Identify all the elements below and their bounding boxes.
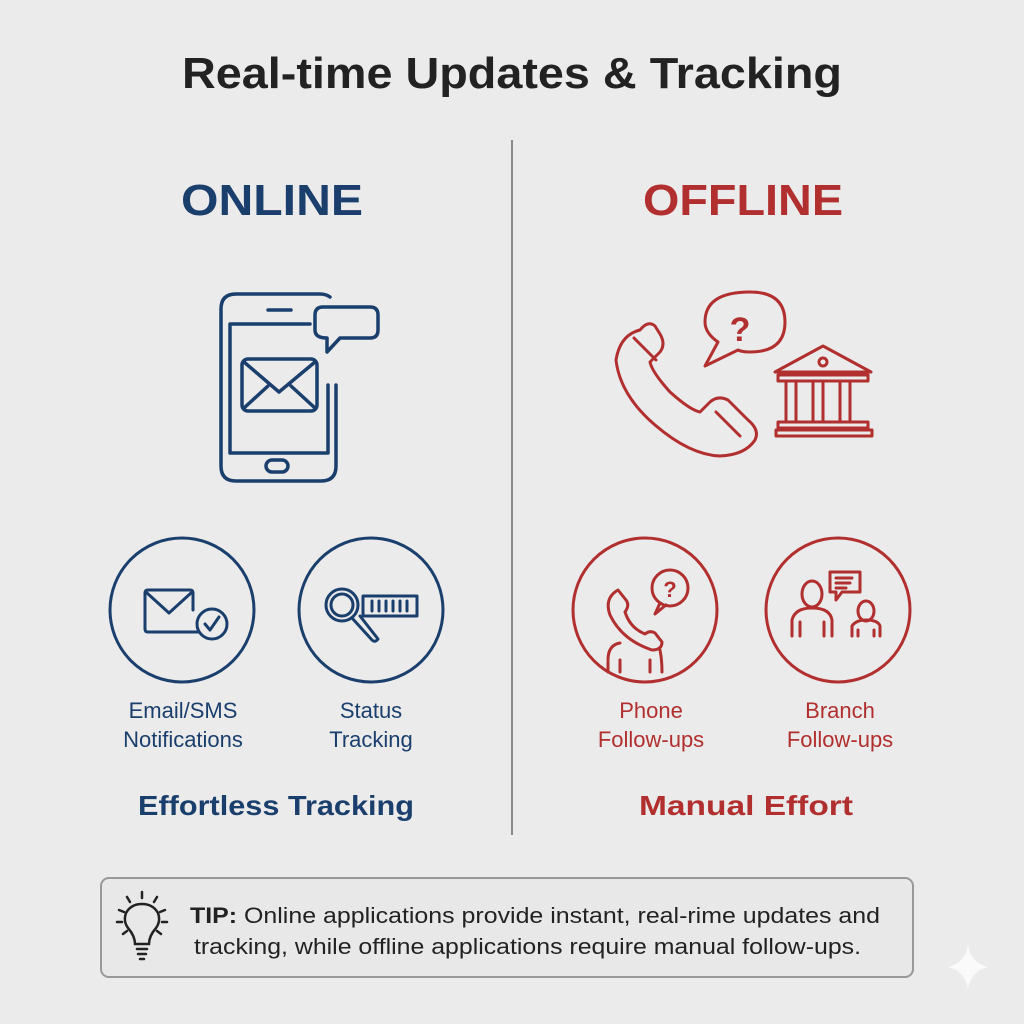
subheading: effortless tracking: Effortless Tracking xyxy=(138,790,414,821)
icon: phone handset, question bubble and bank xyxy=(616,292,872,456)
title: Real-time Updates & Tracking xyxy=(182,49,842,98)
labels: offline features: Follow-ups xyxy=(598,727,704,752)
labels: online features: Email/SMS xyxy=(129,698,237,723)
tip box: TIP: Online applications provide instant, real-rime updates and xyxy=(190,903,880,928)
tip box xyxy=(101,878,913,977)
icon circle: phone follow-ups xyxy=(573,538,717,682)
labels: online features: Tracking xyxy=(329,727,413,752)
subheading: manual effort: Manual Effort xyxy=(639,790,853,821)
labels: online features: Notifications xyxy=(123,727,243,752)
text: ? xyxy=(730,311,750,349)
icon circle: status tracking xyxy=(299,538,443,682)
labels: offline features xyxy=(598,698,893,752)
labels: offline features: Phone xyxy=(619,698,683,723)
text: ? xyxy=(663,577,677,602)
labels: offline features: Follow-ups xyxy=(787,727,893,752)
labels: online features: Status xyxy=(340,698,402,723)
heading: online: ONLINE xyxy=(181,176,363,225)
icon circle: branch follow-ups xyxy=(766,538,910,682)
labels: offline features: Branch xyxy=(805,698,875,723)
icon circle: email notifications xyxy=(110,538,254,682)
icon: light bulb xyxy=(117,892,167,959)
labels: online features xyxy=(123,698,413,752)
icon: sparkle xyxy=(948,945,988,989)
heading: offline: OFFLINE xyxy=(643,176,843,225)
tip box: tracking, while offline applications require manual follow-ups. xyxy=(194,934,861,959)
icon: smartphone with email and chat xyxy=(221,294,378,481)
